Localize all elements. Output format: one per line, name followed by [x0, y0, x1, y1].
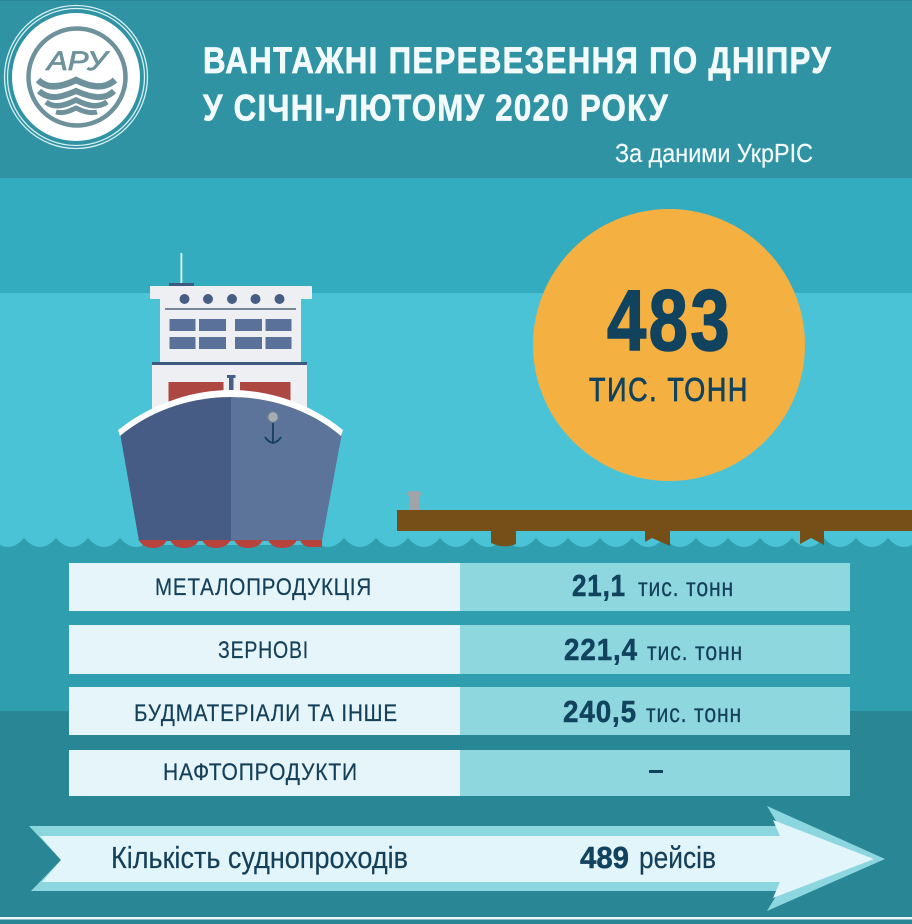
upper deck [150, 286, 312, 363]
table row: building materials and other: 240,5 [563, 694, 637, 729]
table row: grain: 221,4 [564, 632, 638, 667]
bollard [406, 491, 422, 510]
arrow: vessel passages: Кількість суднопроходів [111, 840, 408, 875]
table row: oil products: НАФТОПРОДУКТИ [163, 759, 358, 786]
table row: grain: тис. тонн [647, 636, 743, 666]
header band [0, 1, 912, 178]
hull rim [118, 390, 343, 436]
arrow: vessel passages [29, 806, 885, 911]
hull light side [231, 397, 342, 541]
arrow: vessel passages: 489 [580, 840, 629, 875]
ship [118, 253, 343, 548]
title [203, 40, 832, 128]
arrow: vessel passages: рейсів [639, 840, 716, 875]
mast [169, 253, 194, 286]
total circle: 483 [607, 273, 732, 369]
red keel [139, 540, 322, 548]
table row: metal products [69, 563, 850, 611]
table row: oil products [69, 750, 850, 796]
total circle: ТИС. ТОНН [589, 371, 749, 408]
icon: ARU logo [4, 6, 148, 148]
pier [397, 491, 912, 546]
table row: grain: ЗЕРНОВІ [218, 637, 309, 664]
lower deck [152, 362, 307, 410]
table row: building materials and other [69, 687, 850, 735]
icon: anchor [265, 412, 281, 443]
title: У СІЧНІ-ЛЮТОМУ 2020 РОКУ [203, 88, 669, 128]
table row: grain [69, 625, 850, 674]
table row: metal products: 21,1 [572, 568, 626, 603]
total circle [533, 209, 805, 481]
hull shadow side [120, 397, 231, 541]
icon: ARU logo: АРУ [45, 46, 110, 76]
table row: metal products: МЕТАЛОПРОДУКЦІЯ [155, 574, 372, 601]
water waves [0, 538, 912, 550]
source note: За даними УкрРІС [615, 138, 813, 168]
table row: metal products: тис. тонн [638, 572, 734, 602]
table row: building materials and other: БУДМАТЕРІАЛИ ТА ІНШЕ [134, 700, 398, 727]
table row: building materials and other: тис. тонн [646, 698, 742, 728]
